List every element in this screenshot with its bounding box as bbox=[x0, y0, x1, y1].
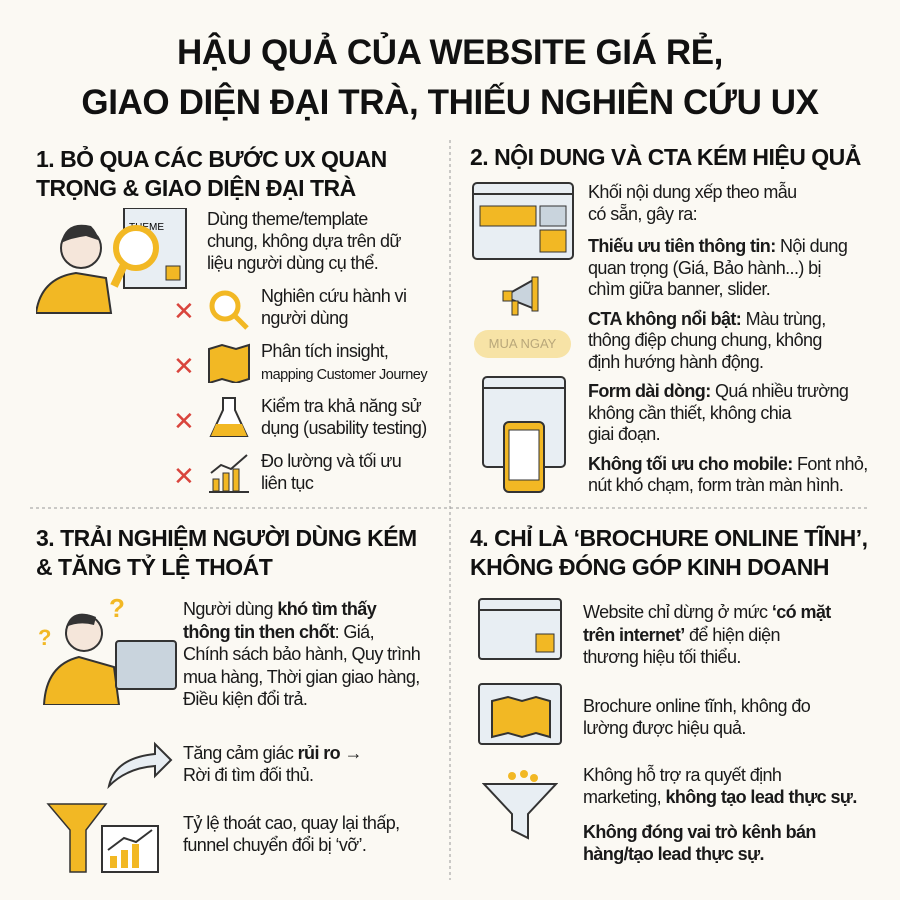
item 4: ✕ bbox=[173, 461, 195, 491]
item 3: Kiểm tra khả năng sử bbox=[261, 396, 421, 416]
text 3a bbox=[183, 599, 420, 709]
heading 4: 4. CHỈ LÀ ‘BROCHURE ONLINE TĨNH’, bbox=[470, 525, 868, 551]
text block 2: không cần thiết, không chia bbox=[588, 402, 791, 422]
text block 2: thông điệp chung chung, không bbox=[588, 330, 822, 350]
item 3: ✕ bbox=[173, 406, 195, 436]
text block 2: Không tối ưu cho mobile: Font nhỏ, bbox=[588, 454, 868, 474]
text 3a: thông tin then chốt: Giá, bbox=[183, 622, 374, 642]
heading 3: 3. TRẢI NGHIỆM NGƯỜI DÙNG KÉM bbox=[36, 525, 417, 551]
text 4: trên internet’ để hiện diện bbox=[583, 624, 780, 644]
item 4: liên tục bbox=[261, 472, 313, 492]
item 2: mapping Customer Journey bbox=[261, 366, 427, 382]
icon: web layout bbox=[472, 182, 574, 260]
text 4: Brochure online tĩnh, không đo bbox=[583, 696, 810, 716]
text 4: Không đóng vai trò kênh bán bbox=[583, 822, 816, 842]
text 3a: mua hàng, Thời gian giao hàng, bbox=[183, 666, 420, 686]
item 4 bbox=[173, 451, 401, 493]
text intro: chung, không dựa trên dữ bbox=[207, 231, 401, 251]
text 3c bbox=[183, 813, 400, 855]
icon: funnel bbox=[482, 770, 558, 840]
item 2: Phân tích insight, bbox=[261, 341, 388, 361]
text block 2: Thiếu ưu tiên thông tin: Nội dung bbox=[588, 236, 847, 256]
text 4: lường được hiệu quả. bbox=[583, 718, 746, 738]
panel 4 bbox=[470, 525, 868, 864]
panel 3 bbox=[36, 525, 420, 873]
icon: arrow bbox=[107, 742, 172, 789]
heading 1 bbox=[36, 146, 387, 201]
text 3a: Người dùng khó tìm thấy bbox=[183, 599, 376, 619]
title: HẬU QUẢ CỦA WEBSITE GIÁ RẺ, bbox=[177, 33, 723, 72]
text block 2: định hướng hành động. bbox=[588, 352, 763, 372]
icon: form and mobile bbox=[482, 376, 566, 493]
illustration: person with magnifier bbox=[36, 208, 187, 314]
heading 2: 2. NỘI DUNG VÀ CTA KÉM HIỆU QUẢ bbox=[470, 144, 861, 170]
text block 2: giai đoạn. bbox=[588, 424, 660, 444]
text intro bbox=[207, 209, 401, 273]
heading 4: KHÔNG ĐÓNG GÓP KINH DOANH bbox=[470, 554, 829, 580]
item 4: Đo lường và tối ưu bbox=[261, 451, 401, 471]
CTA button bbox=[474, 330, 571, 358]
text 3c: funnel chuyển đổi bị ‘vỡ’. bbox=[183, 834, 366, 854]
item 1: ✕ bbox=[173, 296, 195, 326]
illustration: confused user at computer bbox=[38, 595, 177, 705]
text intro: liệu người dùng cụ thể. bbox=[207, 253, 378, 273]
text 3a: Điều kiện đổi trả. bbox=[183, 689, 307, 709]
text block 2: có sẵn, gây ra: bbox=[588, 204, 697, 224]
text 3b: Rời đi tìm đối thủ. bbox=[183, 764, 313, 784]
text block 2: Form dài dòng: Quá nhiều trường bbox=[588, 381, 848, 401]
CTA button: MUA NGAY bbox=[489, 336, 556, 351]
text block 2: CTA không nổi bật: Màu trùng, bbox=[588, 308, 826, 328]
heading 3: & TĂNG TỶ LỆ THOÁT bbox=[36, 554, 272, 580]
illustration: person with magnifier: THEME bbox=[129, 222, 164, 233]
item 1: người dùng bbox=[261, 308, 348, 328]
title bbox=[81, 32, 819, 122]
text 4 bbox=[583, 602, 857, 864]
text 4: Không hỗ trợ ra quyết định bbox=[583, 764, 781, 784]
text intro: Dùng theme/template bbox=[207, 209, 368, 229]
list: missing UX steps bbox=[173, 286, 428, 493]
heading 3 bbox=[36, 525, 417, 580]
text 4: hàng/tạo lead thực sự. bbox=[583, 844, 764, 864]
text block 2: nút khó chạm, form tràn màn hình. bbox=[588, 475, 843, 495]
icon: website bbox=[478, 598, 562, 660]
item 2 bbox=[173, 341, 428, 383]
text 3c: Tỷ lệ thoát cao, quay lại thấp, bbox=[183, 813, 400, 833]
illustration: confused user at computer: ? bbox=[38, 625, 51, 650]
text block 2: Khối nội dung xếp theo mẫu bbox=[588, 182, 797, 202]
text 4: marketing, không tạo lead thực sự. bbox=[583, 787, 857, 807]
text 3b: Tăng cảm giác rủi ro → bbox=[183, 743, 362, 763]
text 3a: Chính sách bảo hành, Quy trình bbox=[183, 644, 420, 664]
heading 4 bbox=[470, 525, 868, 580]
text 3b bbox=[183, 743, 362, 784]
panel 1 bbox=[36, 146, 428, 493]
heading 1: TRỌNG & GIAO DIỆN ĐẠI TRÀ bbox=[36, 175, 356, 201]
item 1 bbox=[173, 286, 406, 330]
icon: megaphone bbox=[502, 276, 538, 316]
heading 1: 1. BỎ QUA CÁC BƯỚC UX QUAN bbox=[36, 146, 387, 172]
title: GIAO DIỆN ĐẠI TRÀ, THIẾU NGHIÊN CỨU UX bbox=[81, 83, 819, 122]
item 1: Nghiên cứu hành vi bbox=[261, 286, 406, 306]
text 4: thương hiệu tối thiểu. bbox=[583, 647, 741, 667]
text block 2: chìm giữa banner, slider. bbox=[588, 279, 770, 299]
item 2: ✕ bbox=[173, 351, 195, 381]
text block 2 bbox=[588, 182, 868, 495]
panel 2 bbox=[470, 144, 868, 495]
icon: broken funnel and chart bbox=[46, 803, 159, 873]
text 4: Website chỉ dừng ở mức ‘có mặt bbox=[583, 602, 831, 622]
item 3: dụng (usability testing) bbox=[261, 418, 427, 438]
item 3 bbox=[173, 396, 427, 438]
icon: brochure bbox=[478, 683, 562, 745]
text block 2: quan trọng (Giá, Bảo hành...) bị bbox=[588, 258, 821, 278]
